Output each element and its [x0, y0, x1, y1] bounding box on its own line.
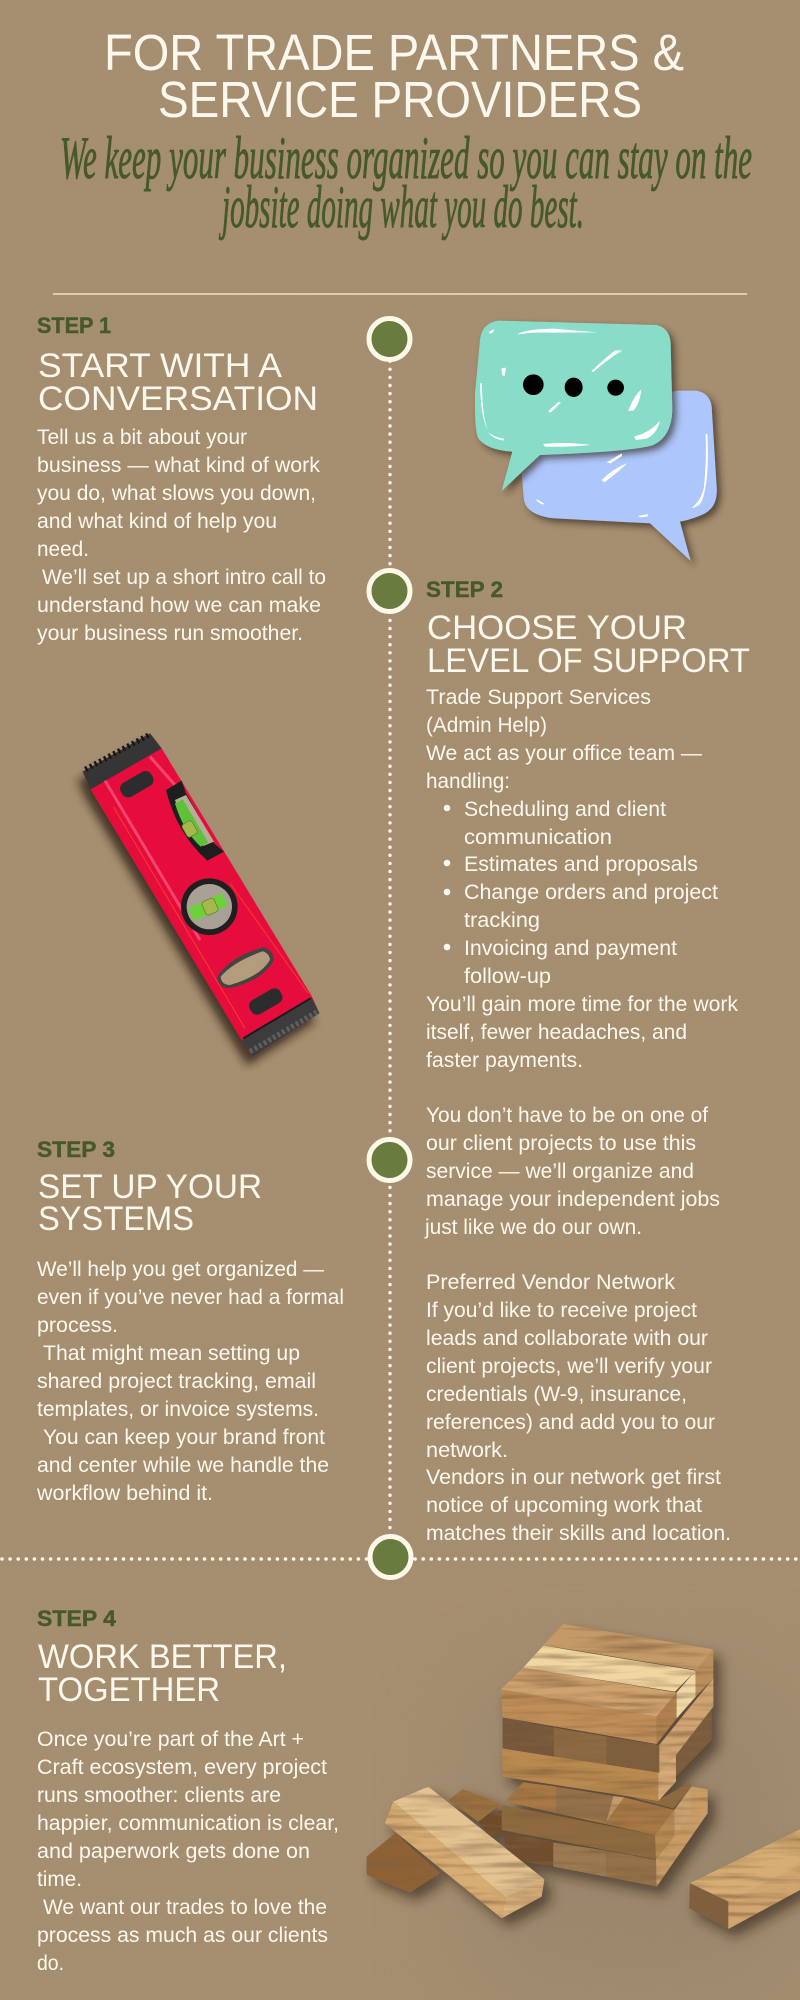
bullet list: Scheduling and client	[464, 798, 666, 821]
timeline node: step 3	[369, 1140, 410, 1180]
step 1 label: STEP 1	[37, 313, 111, 338]
step 3 body text	[36, 1258, 344, 1505]
trade support services text: handling:	[426, 770, 510, 793]
icon: chat bubbles	[475, 321, 717, 561]
step 3 body text: workflow behind it.	[36, 1482, 213, 1505]
step 3 body text: process.	[37, 1314, 118, 1337]
step 2 heading	[427, 609, 750, 680]
preferred vendor network text: references) and add you to our	[426, 1411, 715, 1434]
image: wooden blocks	[367, 1624, 800, 1929]
panel: step 2	[424, 577, 750, 1545]
trade support services text: We act as your office team —	[426, 742, 702, 765]
bullet list: Change orders and project	[464, 881, 718, 904]
step 4 heading: TOGETHER	[38, 1671, 220, 1709]
step 4 body text: do.	[37, 1952, 64, 1975]
step 1 body text: Tell us a bit about your	[37, 426, 247, 449]
step 1 body text: and what kind of help you	[37, 510, 277, 533]
preferred vendor network text: credentials (W-9, insurance,	[426, 1383, 687, 1406]
preferred vendor network text	[426, 1271, 731, 1545]
panel: step 4	[37, 1606, 339, 1975]
step 3 body text: You can keep your brand front	[43, 1426, 325, 1449]
tower	[501, 1624, 713, 1887]
step 3 heading	[38, 1168, 262, 1238]
step 2 heading: LEVEL OF SUPPORT	[427, 642, 750, 680]
step 1 body text: your business run smoother.	[37, 622, 303, 645]
title: SERVICE PROVIDERS	[158, 71, 642, 128]
step 4 body text: and paperwork gets done on	[37, 1840, 310, 1863]
independent jobs text: service — we’ll organize and	[426, 1160, 694, 1183]
step 3 body text: even if you’ve never had a formal	[37, 1286, 344, 1309]
step 4 heading: WORK BETTER,	[38, 1638, 287, 1676]
step 1 heading: START WITH A	[38, 347, 282, 385]
step 3 heading: SYSTEMS	[38, 1200, 194, 1238]
bullet list: communication	[464, 826, 612, 849]
preferred vendor network text: matches their skills and location.	[426, 1522, 731, 1545]
preferred vendor network text: If you’d like to receive project	[426, 1299, 697, 1322]
independent jobs text: just like we do our own.	[424, 1216, 642, 1239]
panel: step 3	[36, 1137, 344, 1505]
step 1 body text: understand how we can make	[37, 594, 321, 617]
preferred vendor network text: leads and collaborate with our	[426, 1327, 708, 1350]
step 4 body text	[37, 1728, 339, 1975]
step 3 body text: templates, or invoice systems.	[37, 1398, 319, 1421]
icon: spirit level	[83, 733, 319, 1057]
step 1 heading	[38, 347, 318, 418]
benefits text: itself, fewer headaches, and	[426, 1021, 687, 1044]
timeline node: step 4	[370, 1536, 411, 1578]
step 4 label: STEP 4	[37, 1606, 117, 1631]
step 1 body text: need.	[37, 538, 89, 561]
loose block right	[689, 1829, 800, 1929]
step 4 body text: happier, communication is clear,	[37, 1812, 339, 1835]
bullet list: Invoicing and payment	[464, 937, 677, 960]
bullet list: Estimates and proposals	[464, 853, 698, 876]
preferred vendor network text: notice of upcoming work that	[426, 1494, 702, 1517]
step 3 label: STEP 3	[37, 1137, 115, 1162]
independent jobs text: manage your independent jobs	[426, 1188, 720, 1211]
independent jobs text: our client projects to use this	[426, 1132, 696, 1155]
step 4 heading	[38, 1638, 287, 1709]
benefits text: faster payments.	[426, 1049, 583, 1072]
title: FOR TRADE PARTNERS &	[104, 24, 684, 81]
step 2 heading: CHOOSE YOUR	[427, 609, 687, 647]
benefits text	[426, 993, 738, 1072]
title	[104, 24, 684, 128]
step 4 body text: runs smoother: clients are	[37, 1784, 281, 1807]
bullet list: tracking	[464, 909, 540, 932]
step 1 body text: business — what kind of work	[37, 454, 321, 477]
step 3 body text: shared project tracking, email	[37, 1370, 316, 1393]
preferred vendor network text: client projects, we’ll verify your	[426, 1355, 712, 1378]
step 1 body text: We’ll set up a short intro call to	[42, 566, 326, 589]
panel: step 1	[37, 313, 326, 645]
step 2 label: STEP 2	[426, 577, 503, 602]
benefits text: You’ll gain more time for the work	[426, 993, 738, 1016]
loose blocks left	[367, 1787, 544, 1918]
step 3 body text: and center while we handle the	[37, 1454, 329, 1477]
tagline	[60, 125, 752, 240]
step 1 body text: you do, what slows you down,	[37, 482, 316, 505]
step 3 heading: SET UP YOUR	[38, 1168, 262, 1206]
timeline node: step 1	[369, 318, 410, 360]
timeline node: step 2	[369, 570, 410, 612]
preferred vendor network text: Vendors in our network get first	[426, 1466, 721, 1489]
independent jobs text	[424, 1104, 720, 1239]
trade support services text: (Admin Help)	[426, 714, 547, 737]
step 3 body text: We’ll help you get organized —	[37, 1258, 324, 1281]
independent jobs text: You don’t have to be on one of	[426, 1104, 708, 1127]
step 1 heading: CONVERSATION	[38, 380, 318, 418]
step 4 body text: We want our trades to love the	[43, 1896, 327, 1919]
preferred vendor network text: Preferred Vendor Network	[426, 1271, 675, 1294]
bullet list: follow-up	[464, 965, 551, 988]
trade support services text: Trade Support Services	[426, 686, 651, 709]
step 4 body text: process as much as our clients	[37, 1924, 328, 1947]
step 4 body text: Once you’re part of the Art +	[37, 1728, 304, 1751]
preferred vendor network text: network.	[426, 1439, 508, 1462]
step 3 body text: That might mean setting up	[43, 1342, 300, 1365]
step 4 body text: time.	[37, 1868, 82, 1891]
step 4 body text: Craft ecosystem, every project	[37, 1756, 327, 1779]
bullet list	[444, 798, 718, 988]
step 1 body text	[37, 426, 326, 645]
trade support services text	[426, 686, 702, 793]
